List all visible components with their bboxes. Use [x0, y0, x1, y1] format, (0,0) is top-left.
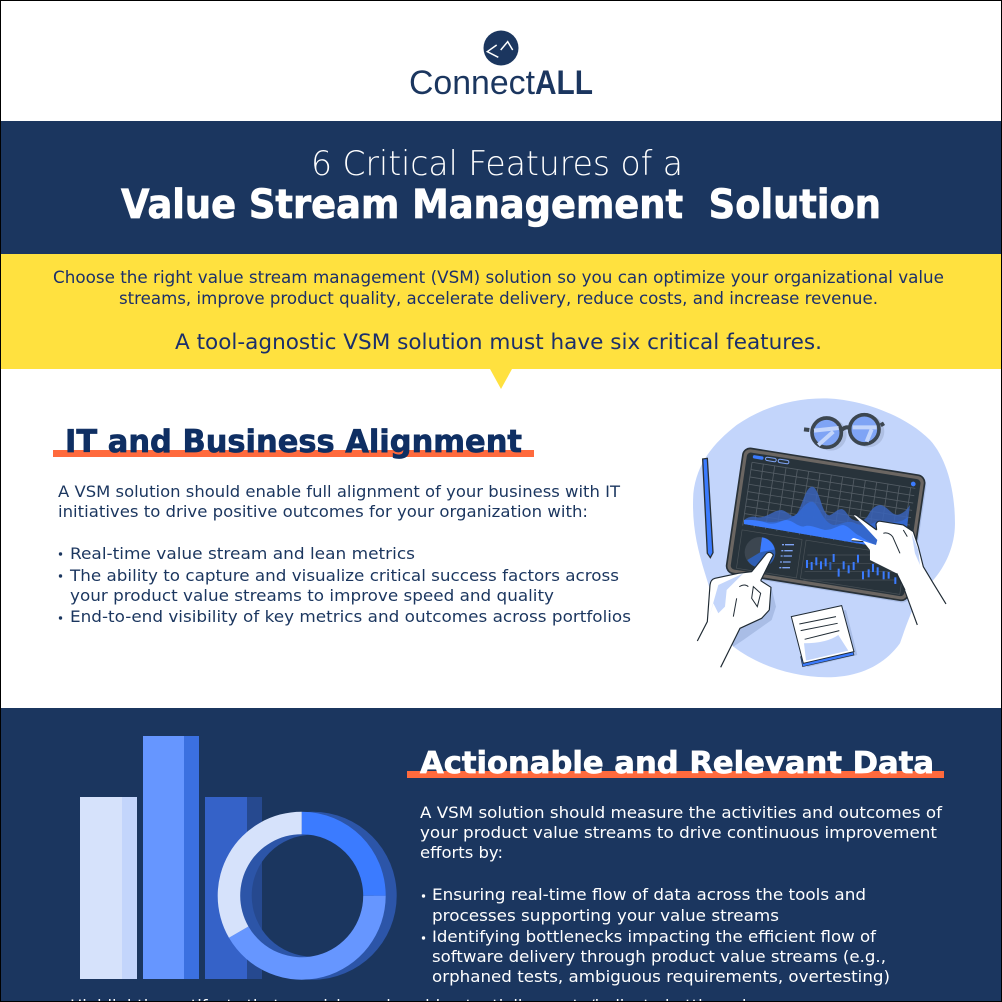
icon: stylus pen — [703, 458, 713, 558]
intro band: streams, improve product quality, accelerate delivery, reduce costs, and increase revenue. — [119, 289, 878, 308]
icon: sticky note — [791, 606, 857, 667]
icon: right hand — [851, 515, 946, 630]
bullet list: data features: orphaned tests, ambiguous requirements, overtesting) — [432, 967, 890, 986]
bar: light — [80, 797, 137, 979]
heading: IT and Business Alignment: IT and Business Alignment — [65, 424, 522, 460]
area chart — [744, 487, 910, 547]
bullet list: alignment features: End-to-end visibility of key metrics and outcomes across portfolios — [70, 607, 631, 626]
bullet list: alignment features — [59, 544, 631, 626]
bullet list: data features: Identifying bottlenecks impacting the efficient flow of — [432, 927, 876, 946]
pie chart with legend — [745, 537, 794, 568]
intro band: Choose the right value stream management (VSM) solution so you can optimize your organizational value — [53, 268, 944, 287]
bullet list: data features: processes supporting your value streams — [432, 906, 779, 925]
text block: alignment intro — [58, 482, 620, 521]
bullet list: alignment features: Real-time value stream and lean metrics — [70, 544, 415, 563]
text block: data intro — [420, 803, 942, 862]
intro band — [0, 254, 1002, 389]
blob background — [693, 398, 955, 677]
title banner: 6 Critical Features of a — [311, 144, 683, 184]
panel: Actionable and Relevant Data — [0, 708, 1002, 1002]
title banner: Value Stream Management Solution — [121, 182, 881, 228]
logo: ConnectALL: Connect — [409, 64, 536, 102]
bullet list: alignment features: your product value streams to improve speed and quality — [70, 586, 554, 605]
bar: dark — [205, 797, 262, 979]
candlestick chart — [803, 554, 897, 584]
bar chart with donut — [80, 736, 397, 980]
logo: ConnectALL — [409, 30, 593, 102]
bullet list: data features: Ensuring real-time flow of data across the tools and — [432, 885, 866, 904]
heading: Actionable and Relevant Data: Actionable and Relevant Data — [420, 746, 934, 781]
intro band: A tool-agnostic VSM solution must have six critical features. — [175, 330, 822, 355]
bullet list: data features: software delivery through product value streams (e.g., — [432, 947, 886, 966]
bullet list: alignment features: The ability to capture and visualize critical success factors across — [69, 566, 619, 585]
panel: IT and Business Alignment — [53, 424, 631, 626]
text block: data intro: your product value streams to drive continuous improvement — [420, 823, 937, 842]
icon: glasses — [804, 415, 884, 451]
tablet — [725, 447, 928, 604]
text block: data intro: A VSM solution should measure the activities and outcomes of — [420, 803, 942, 822]
bar: medium — [143, 736, 199, 979]
text block: alignment intro: initiatives to drive positive outcomes for your organization with: — [58, 502, 588, 521]
logo: ConnectALL: ALL — [535, 64, 593, 102]
text block: data intro: efforts by: — [420, 843, 503, 862]
icon: left hand — [697, 552, 776, 667]
title banner — [0, 121, 1002, 254]
text block: alignment intro: A VSM solution should enable full alignment of your business with IT — [58, 482, 620, 501]
bullet list: data features — [70, 885, 890, 1002]
donut chart — [218, 812, 397, 980]
illustration: hands on tablet dashboard — [693, 398, 955, 677]
